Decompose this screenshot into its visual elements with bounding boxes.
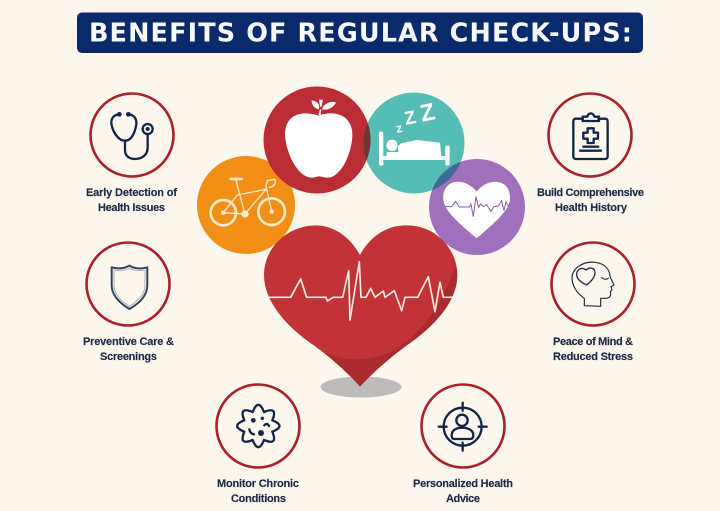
icon: white heart with pulse <box>443 182 510 238</box>
label: Health Issues <box>98 202 165 214</box>
icon: head with heart <box>572 262 614 306</box>
item: chronic conditions <box>216 384 300 505</box>
icon: sleeping person in bed: Z <box>418 98 438 128</box>
icon: white apple <box>285 99 352 178</box>
icon: shield <box>112 266 147 309</box>
label: Screenings <box>100 351 157 363</box>
label: Early Detection of <box>86 187 177 199</box>
icon: sleeping person in bed: Z <box>402 106 418 129</box>
title banner: BENEFITS OF REGULAR CHECK-UPS: <box>89 18 632 48</box>
label: Reduced Stress <box>553 351 633 363</box>
circle: purple heartbeat <box>429 159 525 255</box>
icon: clipboard with cross <box>573 113 608 159</box>
item: early detection <box>86 94 177 214</box>
label: Health History <box>555 202 628 214</box>
label <box>217 478 299 505</box>
icon: sleeping person in bed <box>379 98 450 166</box>
label <box>413 478 513 505</box>
overlap: apple and sleep circles <box>364 122 370 160</box>
item: preventive care <box>83 242 174 363</box>
heart shadow <box>320 376 402 398</box>
label <box>86 187 177 214</box>
label: Advice <box>446 493 480 505</box>
label <box>553 336 633 363</box>
label: Build Comprehensive <box>537 187 644 199</box>
ECG line <box>268 262 453 320</box>
circle: sleep <box>364 92 464 194</box>
label <box>537 187 644 214</box>
circle: apple <box>264 86 370 194</box>
label: Preventive Care & <box>83 336 174 348</box>
main heart with shadow <box>257 225 463 398</box>
icon: person in target <box>439 403 487 451</box>
label: Monitor Chronic <box>217 478 299 490</box>
label: Peace of Mind & <box>553 336 633 348</box>
label <box>83 336 174 363</box>
icon: sleeping person in bed: z <box>395 121 404 136</box>
label: Personalized Health <box>413 478 513 490</box>
overlap: sleep and purple circles <box>432 162 461 190</box>
label: Conditions <box>231 493 286 505</box>
circle: bicycle <box>197 156 295 254</box>
icon: bicycle <box>211 179 285 225</box>
icon: stethoscope <box>111 112 153 159</box>
item: comprehensive history <box>537 94 644 214</box>
icon: virus <box>237 405 279 447</box>
item: personalized advice <box>413 384 513 505</box>
item: peace of mind <box>552 242 634 363</box>
